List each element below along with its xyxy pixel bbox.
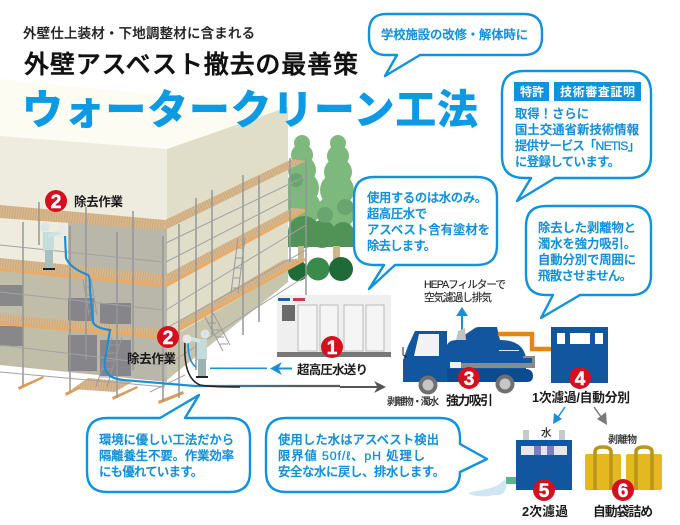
poles xyxy=(23,158,306,402)
callout: school: 学校施設の改修・解体時に xyxy=(381,27,528,42)
callout: patent xyxy=(502,71,651,201)
truck xyxy=(403,327,535,394)
label: HEPA xyxy=(424,279,506,304)
label: secondary filter: 2次濾過 xyxy=(522,504,568,519)
worker lower xyxy=(182,330,210,378)
unit 6: bags xyxy=(585,447,662,502)
callout: eco xyxy=(87,395,250,492)
arrow: sludge to truck xyxy=(340,381,386,393)
label: HEPA: HEPAフィルターで xyxy=(424,279,506,291)
unit 5: secondary filter: 5 xyxy=(539,481,550,502)
label: suction: 強力吸引 xyxy=(446,393,493,408)
label: HEPA: 空気濾過し排気 xyxy=(424,291,492,304)
label: removal work upper: 2 xyxy=(51,192,61,213)
trees xyxy=(283,135,355,281)
callout: school xyxy=(369,14,542,76)
title: method name: ウォータークリーン工法 xyxy=(22,87,478,133)
building xyxy=(0,79,288,382)
badge: technical certificate: 技術審査証明 xyxy=(560,84,635,99)
callout: suction: 濁水を強力吸引。 xyxy=(538,236,636,251)
badge: patent xyxy=(514,82,549,101)
building roof xyxy=(0,79,288,149)
callout: water treatment: 安全な水に戻し、排水します。 xyxy=(278,464,445,479)
label: removal work lower: 2 xyxy=(163,328,173,349)
unit 5: secondary filter xyxy=(468,430,572,502)
label: sludge: 剥離物・濁水 xyxy=(387,395,439,408)
label: water: 水 xyxy=(541,426,552,439)
foot boards xyxy=(18,376,184,404)
callout: eco: 環境に優しい工法だから xyxy=(99,432,234,447)
blue hose xyxy=(65,236,340,387)
label: debris: 剥離物 xyxy=(608,433,637,446)
label: removal work lower xyxy=(127,326,179,366)
unit 1: high pressure pump xyxy=(277,295,391,359)
unit 4: primary filter xyxy=(551,327,608,390)
callout: suction: 自動分別で周囲に xyxy=(538,252,636,267)
callout: patent: 提供サービス「NETIS」 xyxy=(515,138,640,153)
scaffolding xyxy=(0,158,306,404)
callout: water treatment: 使用した水はアスベスト検出 xyxy=(278,432,439,447)
callout: eco: 隔離養生不要。作業効率 xyxy=(99,448,234,463)
title: subheading: 外壁仕上装材・下地調整材に含まれる xyxy=(23,25,255,41)
callout: patent: に登録しています。 xyxy=(515,154,620,169)
windows xyxy=(0,285,23,306)
callout: suction: 除去した剥離物と xyxy=(538,220,636,235)
callout: eco: にも優れています。 xyxy=(99,465,203,479)
callout: water only xyxy=(354,177,497,289)
label: auto bagging: 自動袋詰め xyxy=(593,504,653,519)
callout: water only: 除去します。 xyxy=(367,238,436,253)
arrow: water xyxy=(553,407,565,424)
callout: water only: アスベスト含有塗材を xyxy=(367,222,490,237)
callout: suction xyxy=(526,206,651,318)
callout: water treatment: 限界値 50f/ℓ、pH 処理し xyxy=(278,448,425,463)
arrow: water feed xyxy=(210,362,292,375)
callout: water only: 使用するのは水のみ。 xyxy=(367,190,487,205)
pipe xyxy=(498,334,551,349)
left wall xyxy=(0,136,167,382)
callout: suction: 飛散させません。 xyxy=(538,268,632,283)
callout: patent: 取得！さらに xyxy=(515,106,589,121)
callout: water treatment xyxy=(266,418,487,492)
arrow: exhaust xyxy=(456,307,468,332)
worker upper xyxy=(40,222,65,270)
title: main: 外壁アスベスト撤去の最善策 xyxy=(24,51,358,79)
label: removal work upper: 除去作業 xyxy=(74,194,123,209)
callout: water only: 超高圧水で xyxy=(367,206,427,221)
unit 1: high pressure pump: 1 xyxy=(327,338,338,359)
arrow: debris xyxy=(594,407,607,425)
label: ultra high pressure water: 超高圧水送り xyxy=(297,362,368,377)
truck: 3 xyxy=(464,369,474,390)
unit 6: bags: 6 xyxy=(618,481,628,502)
label: removal work lower: 除去作業 xyxy=(127,351,176,366)
label: removal work upper xyxy=(45,190,123,213)
badge: technical certificate xyxy=(554,82,641,101)
label: primary filter: 1次濾過/自動分別 xyxy=(532,390,630,405)
floor plank xyxy=(72,378,132,392)
rails xyxy=(0,176,306,392)
ladders xyxy=(83,279,97,315)
planks xyxy=(0,205,165,230)
right wall xyxy=(167,107,288,380)
unit 4: primary filter: 4 xyxy=(575,369,586,390)
callout: patent: 国土交通省新技術情報 xyxy=(515,122,640,137)
badge: patent: 特許 xyxy=(520,84,544,99)
